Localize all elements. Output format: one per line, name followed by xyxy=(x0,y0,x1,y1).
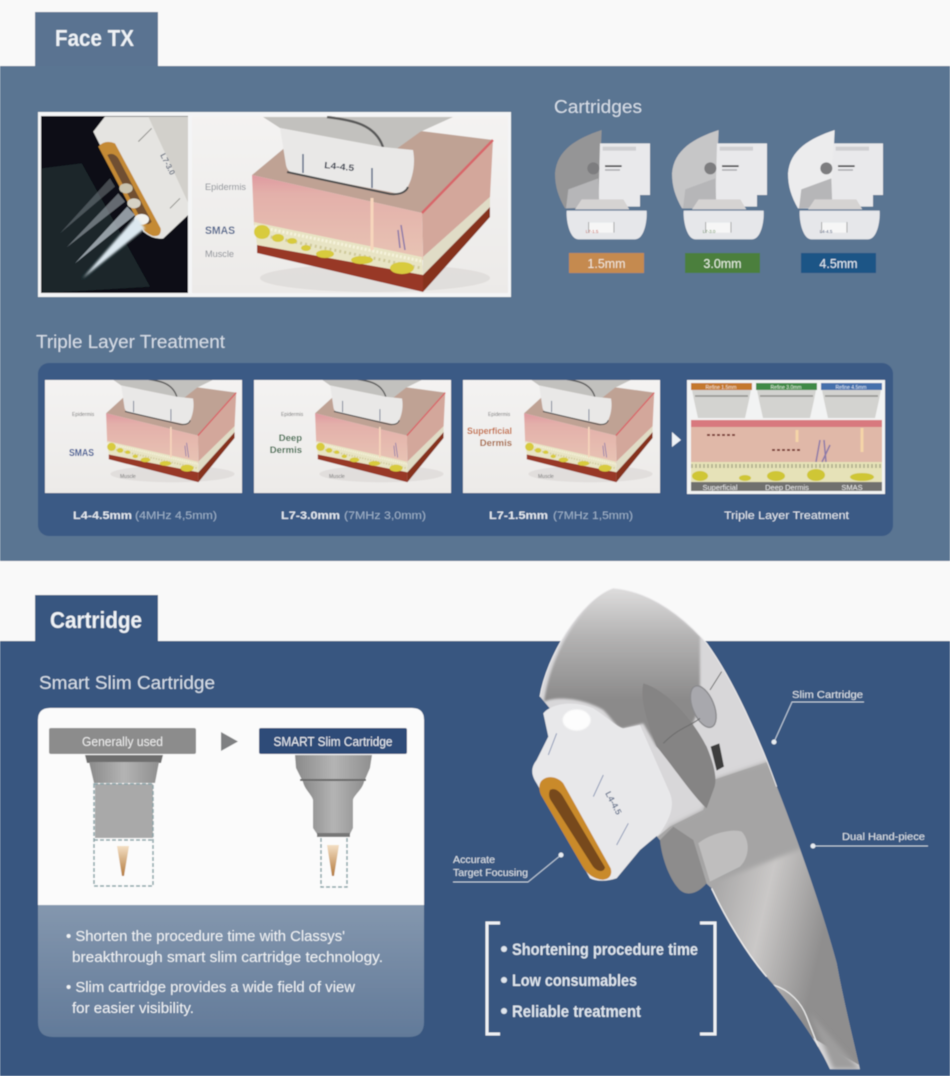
text block: slim cartridge benefits: breakthrough smart slim cartridge technology. xyxy=(72,950,383,966)
step: L7-1.5mm Superficial Dermis: (7MHz 1,5mm) xyxy=(553,510,633,522)
heading: Triple Layer Treatment: Triple Layer Treatment xyxy=(36,332,225,352)
cartridge 1.5mm: L7-1.5 xyxy=(586,229,599,234)
photo: ultrasound beams from cartridge: L7-3.0 xyxy=(158,152,177,177)
step: L7-3.0mm Deep Dermis: Muscle xyxy=(329,474,345,480)
bracketed key benefits: Low consumables xyxy=(512,972,637,990)
card: slim cartridge comparison xyxy=(38,708,424,1037)
heading: Smart Slim Cartridge: Smart Slim Cartridge xyxy=(39,673,215,693)
callout: Dual Hand-piece: Dual Hand-piece xyxy=(842,831,925,843)
label: Epidermis: Epidermis xyxy=(205,182,246,193)
text block: slim cartridge benefits: • Slim cartridge provides a wide field of view xyxy=(66,980,356,996)
text block: slim cartridge benefits xyxy=(66,929,383,1017)
photo: skin layer block xyxy=(192,116,508,293)
step: combined triple layer view xyxy=(687,380,885,522)
step: combined triple layer view: Refine 1.5mm xyxy=(705,385,737,391)
cartridge 4.5mm xyxy=(788,130,883,273)
text block: slim cartridge benefits: for easier visibility. xyxy=(72,1001,194,1017)
step: L7-3.0mm Deep Dermis: Deep xyxy=(279,433,302,444)
step: L7-1.5mm Superficial Dermis xyxy=(463,379,660,522)
step: L7-1.5mm Superficial Dermis: Epidermis xyxy=(488,412,511,418)
illustration: dual hand-piece xyxy=(532,587,873,1073)
step: L7-1.5mm Superficial Dermis: Muscle xyxy=(538,474,554,480)
cartridge 1.5mm xyxy=(555,130,650,273)
step: combined triple layer view: SMAS xyxy=(841,483,863,492)
diagram: general cartridge xyxy=(85,755,163,886)
step: L7-3.0mm Deep Dermis xyxy=(254,379,451,522)
panel: Face TX xyxy=(0,12,950,561)
bracketed key benefits: Shortening procedure time xyxy=(512,941,698,959)
step: L7-1.5mm Superficial Dermis: L7-1.5mm xyxy=(489,510,548,522)
step: L4-4.5mm SMAS: Muscle xyxy=(120,474,136,480)
step: combined triple layer view: Superficial xyxy=(702,483,738,492)
cartridge 4.5mm: L4-4.5 xyxy=(820,229,833,234)
step: L7-3.0mm Deep Dermis: (7MHz 3,0mm) xyxy=(344,510,426,522)
photo: ultrasound beams from cartridge xyxy=(41,116,190,293)
label: Generally used xyxy=(49,728,196,754)
tab: Cartridge: Cartridge xyxy=(50,607,142,633)
photo frame: cartridge and skin block xyxy=(38,112,511,297)
photo: skin layer block: L4-4.5 xyxy=(324,160,355,173)
step: combined triple layer view: Deep Dermis xyxy=(765,483,809,492)
label: SMART Slim Cartridge xyxy=(259,728,407,754)
cartridge 3.0mm: 3.0mm xyxy=(703,257,742,271)
tab: Face TX xyxy=(35,12,158,66)
callout: Accurate Target Focusing: Target Focusing xyxy=(453,867,528,879)
step: combined triple layer view: Refine 4.5mm xyxy=(835,385,867,391)
step: L7-3.0mm Deep Dermis: L7-3.0mm xyxy=(281,510,340,522)
cartridge 3.0mm: L7-3.0 xyxy=(703,229,716,234)
callout: Dual Hand-piece xyxy=(810,831,928,848)
label: Muscle: Muscle xyxy=(205,249,234,260)
arrow: comparison xyxy=(221,732,238,751)
tab: Cartridge xyxy=(35,595,158,641)
arrow to combined view xyxy=(672,432,681,447)
heading: Cartridges: Cartridges xyxy=(554,97,642,117)
panel: Cartridge xyxy=(0,587,950,1076)
panel: triple layer steps xyxy=(38,363,893,536)
label: SMAS: SMAS xyxy=(205,225,235,237)
step: combined triple layer view: Refine 3.0mm xyxy=(770,385,802,391)
callout: Slim Cartridge: Slim Cartridge xyxy=(792,689,863,701)
cartridge 3.0mm xyxy=(672,130,767,273)
step: L4-4.5mm SMAS: SMAS xyxy=(69,448,94,459)
step: L7-3.0mm Deep Dermis: Dermis xyxy=(270,445,302,456)
label: Generally used: Generally used xyxy=(82,735,163,749)
cartridge 1.5mm: 1.5mm xyxy=(587,257,626,271)
label: SMART Slim Cartridge: SMART Slim Cartridge xyxy=(274,735,393,749)
bracketed key benefits xyxy=(487,923,715,1034)
step: L4-4.5mm SMAS: Epidermis xyxy=(72,412,95,418)
bracketed key benefits: Reliable treatment xyxy=(512,1003,641,1021)
step: combined triple layer view: Triple Layer Treatment xyxy=(724,510,849,522)
step: L7-3.0mm Deep Dermis: Epidermis xyxy=(281,412,304,418)
step: L4-4.5mm SMAS xyxy=(45,379,242,522)
illustration: dual hand-piece: L4-4.5 xyxy=(603,790,624,817)
cartridge 4.5mm: 4.5mm xyxy=(819,257,858,271)
callout: Accurate Target Focusing xyxy=(453,852,564,882)
step: L7-1.5mm Superficial Dermis: Superficial xyxy=(467,426,512,437)
diagram: slim cartridge xyxy=(295,755,372,887)
callout: Accurate Target Focusing: Accurate xyxy=(453,854,495,866)
step: L7-1.5mm Superficial Dermis: Dermis xyxy=(480,438,512,449)
step: L4-4.5mm SMAS: L4-4.5mm xyxy=(73,510,132,522)
text block: slim cartridge benefits: • Shorten the procedure time with Classys' xyxy=(66,929,345,945)
tab: Face TX: Face TX xyxy=(55,25,135,51)
step: L4-4.5mm SMAS: (4MHz 4,5mm) xyxy=(135,510,217,522)
callout: Slim Cartridge xyxy=(772,689,864,744)
